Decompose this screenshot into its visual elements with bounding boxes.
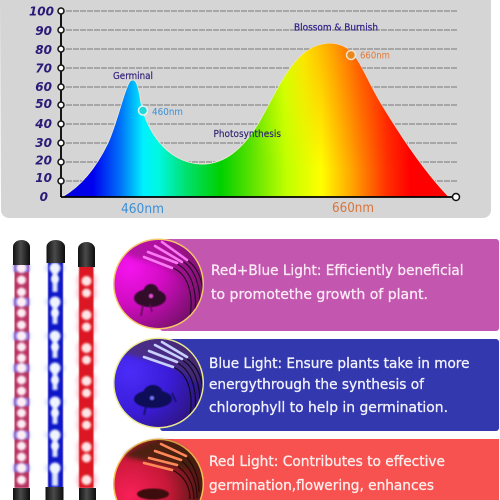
y axis labels: 20 bbox=[35, 154, 52, 168]
y axis labels: 70 bbox=[35, 62, 52, 76]
marker: 660nm: 660nm bbox=[360, 50, 390, 62]
y axis labels: 50 bbox=[35, 97, 52, 111]
label: Germinal: Germinal bbox=[113, 71, 153, 82]
light tube: red and blue bbox=[12, 240, 30, 500]
x axis label: 660nm: 660nm bbox=[332, 200, 374, 216]
panel background bbox=[160, 239, 499, 331]
spectrum curve bbox=[62, 40, 449, 197]
panel text: Blue Light: Ensure plants take in more bbox=[209, 356, 470, 372]
panel text: energythrough the synthesis of bbox=[209, 377, 425, 393]
icon: purple lamp and plant bbox=[113, 238, 204, 330]
panel text: Red+Blue Light: Efficiently beneficial bbox=[211, 263, 464, 279]
panel text: germination,flowering, enhances bbox=[209, 478, 434, 494]
icon: blue lamp and plant bbox=[113, 335, 204, 428]
panel text: Red Light: Contributes to effective bbox=[209, 454, 445, 470]
light tube: blue bbox=[45, 240, 65, 500]
y axis labels: 90 bbox=[35, 24, 52, 38]
label: Photosynthesis: Photosynthesis bbox=[214, 129, 281, 140]
label: Blossom & Burnish: Blossom & Burnish bbox=[294, 22, 378, 34]
marker: 460nm: 460nm bbox=[152, 107, 183, 118]
icon: red lamp and plant bbox=[113, 439, 204, 500]
panel text: to promotethe growth of plant. bbox=[211, 287, 428, 303]
y axis labels: 30 bbox=[35, 136, 52, 150]
panel background bbox=[160, 439, 499, 500]
grid lines bbox=[66, 11, 457, 181]
y axis labels bbox=[29, 4, 54, 204]
panel: blue light bbox=[113, 335, 499, 431]
panel text bbox=[209, 454, 445, 494]
panel text: chlorophyll to help in germination. bbox=[209, 400, 448, 416]
y axis labels: 80 bbox=[35, 43, 52, 57]
y axis labels: 100 bbox=[29, 4, 54, 18]
panel background bbox=[160, 339, 499, 431]
light tube: red bbox=[76, 242, 96, 500]
marker: 660nm bbox=[346, 50, 390, 62]
marker: 460nm bbox=[138, 106, 183, 118]
panel: red light bbox=[113, 439, 499, 500]
panel: red+blue light bbox=[113, 238, 499, 331]
axes bbox=[58, 8, 460, 200]
panel: spectrum chart bbox=[0, 0, 491, 218]
y axis labels: 40 bbox=[34, 117, 52, 131]
y axis labels: 0 bbox=[40, 190, 48, 204]
x axis label: 460nm: 460nm bbox=[121, 201, 164, 217]
y axis labels: 60 bbox=[35, 80, 52, 94]
y axis labels: 10 bbox=[35, 171, 52, 185]
panel text bbox=[211, 263, 464, 303]
panel text bbox=[209, 356, 470, 416]
chart background bbox=[0, 0, 491, 218]
